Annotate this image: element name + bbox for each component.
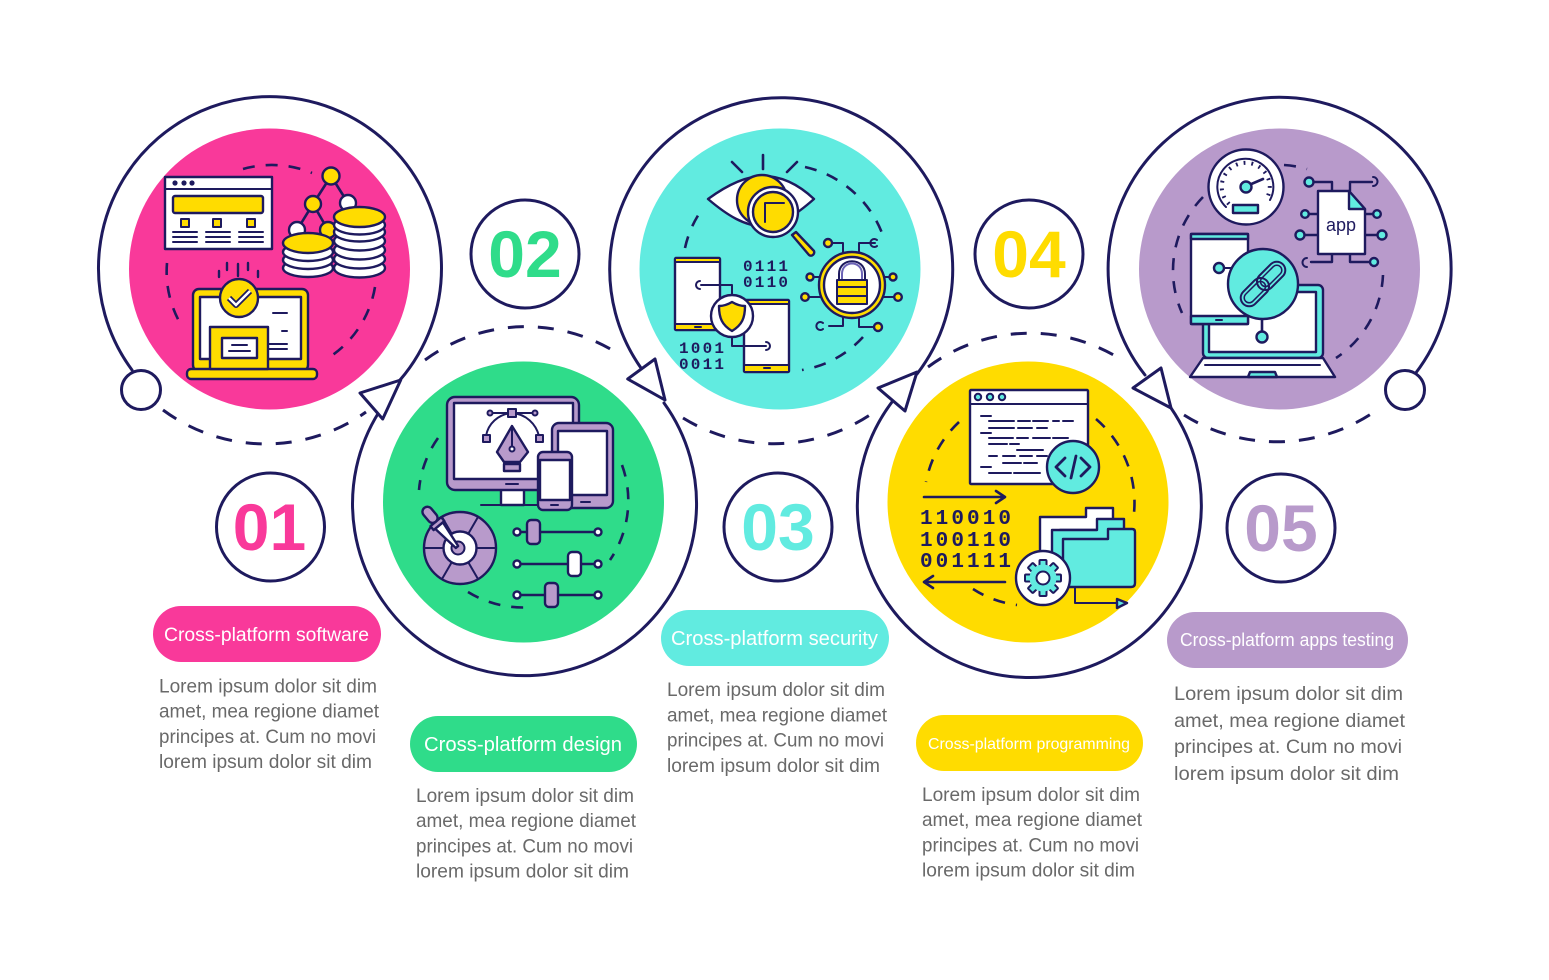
arrow: step 2 to step 3 xyxy=(628,359,665,400)
label: Cross-platform programming xyxy=(916,715,1143,771)
icon: tree and coin stacks xyxy=(283,168,385,278)
text: binary digits: 1001 xyxy=(679,340,724,358)
text block: step 3 description xyxy=(667,679,888,777)
panel: step 5 testing icon xyxy=(1139,128,1420,410)
text: binary code: 100110 xyxy=(920,530,1011,553)
text block: step 1 description xyxy=(159,676,380,773)
icon: lock with circuits xyxy=(801,239,902,331)
badge: number 03: 03 xyxy=(741,490,815,564)
arrow: step 4 to step 5 xyxy=(1133,368,1171,408)
label: Cross-platform design: Cross-platform design xyxy=(424,734,622,756)
text block: step 5 description: Lorem ipsum dolor sit dim xyxy=(1174,683,1403,705)
text block: step 5 description: principes at. Cum no movi xyxy=(1174,736,1402,758)
badge: number 04 xyxy=(975,200,1083,308)
text: binary digits xyxy=(679,258,788,374)
text block: step 1 description: lorem ipsum dolor sit dim xyxy=(159,751,372,773)
connector: outer rings and dashed paths xyxy=(98,97,1451,678)
text block: step 2 description: Lorem ipsum dolor sit dim xyxy=(416,785,634,807)
badge: number 05 xyxy=(1227,474,1335,582)
icon: color wheel with dropper xyxy=(419,503,496,584)
icon: sliders xyxy=(514,520,602,607)
text block: step 1 description: principes at. Cum no movi xyxy=(159,726,376,748)
icon: eye and magnifier xyxy=(708,155,814,256)
text block: step 4 description: principes at. Cum no movi xyxy=(922,834,1139,856)
text: binary code: 001111 xyxy=(920,551,1011,574)
label: Cross-platform apps testing: Cross-platform apps testing xyxy=(1180,630,1394,650)
badge: number 02 xyxy=(471,200,579,308)
text block: step 1 description: Lorem ipsum dolor sit dim xyxy=(159,676,377,698)
icon: app file with circuits xyxy=(1296,177,1386,267)
text: binary digits: 0110 xyxy=(743,274,788,292)
text: app label: app xyxy=(1326,215,1356,235)
badge: number 04: 04 xyxy=(992,217,1066,291)
icon: code window xyxy=(970,390,1099,493)
text block: step 4 description: amet, mea regione diamet xyxy=(922,809,1143,831)
label: Cross-platform security: Cross-platform security xyxy=(671,628,878,650)
text block: step 1 description: amet, mea regione diamet xyxy=(159,700,380,722)
text block: step 2 description: lorem ipsum dolor sit dim xyxy=(416,860,629,882)
icon: chain link badge xyxy=(1228,249,1298,342)
text block: step 4 description xyxy=(922,784,1143,882)
arrow: step 1 to step 2 xyxy=(360,380,401,419)
panel: step 3 security icon xyxy=(640,128,920,410)
arrow: step 3 to step 4 xyxy=(878,372,917,411)
icon: data arrows xyxy=(924,491,1005,588)
text block: step 2 description: amet, mea regione diamet xyxy=(416,810,637,832)
text block: step 5 description xyxy=(1174,683,1406,785)
text block: step 3 description: Lorem ipsum dolor sit dim xyxy=(667,679,885,701)
badge: number 05: 05 xyxy=(1244,491,1318,565)
text block: step 5 description: lorem ipsum dolor sit dim xyxy=(1174,763,1399,785)
label: Cross-platform software: Cross-platform software xyxy=(164,625,369,646)
text block: step 4 description: lorem ipsum dolor sit dim xyxy=(922,860,1135,882)
text block: step 2 description: principes at. Cum no movi xyxy=(416,836,633,858)
icon: monitor with pen tool xyxy=(447,397,579,505)
panel: step 2 design icon xyxy=(383,362,664,642)
text: binary digits: 0111 xyxy=(743,258,788,276)
text block: step 3 description: principes at. Cum no movi xyxy=(667,730,884,752)
badge: number 01 xyxy=(216,473,324,581)
icon: laptop xyxy=(1190,285,1335,377)
label: Cross-platform apps testing xyxy=(1167,612,1408,668)
text block: step 3 description: lorem ipsum dolor sit dim xyxy=(667,755,880,777)
badge: number 03 xyxy=(724,473,832,581)
text block: step 4 description: Lorem ipsum dolor sit dim xyxy=(922,784,1140,806)
text block: step 2 description xyxy=(416,785,637,882)
icon: folders with gear xyxy=(1016,508,1135,608)
label: Cross-platform programming: Cross-platform programming xyxy=(928,736,1130,753)
text block: step 3 description: amet, mea regione diamet xyxy=(667,704,888,726)
text: binary code: 110010 xyxy=(920,508,1011,531)
badge: number 01: 01 xyxy=(233,490,306,564)
icon: speed gauge xyxy=(1208,150,1284,224)
panel: step 1 software icon xyxy=(129,128,410,410)
icon: devices with shield xyxy=(675,258,789,372)
label: Cross-platform software xyxy=(153,606,381,662)
icon: tablet and phone xyxy=(538,423,613,510)
badge: number 02: 02 xyxy=(488,217,562,291)
label: Cross-platform security xyxy=(661,610,889,666)
icon: browser window xyxy=(165,177,272,249)
icon: tablet xyxy=(1191,234,1248,324)
text: binary digits: 0011 xyxy=(679,356,724,374)
text block: step 5 description: amet, mea regione diamet xyxy=(1174,710,1406,732)
text: binary code xyxy=(920,508,1011,574)
icon: laptop with check xyxy=(187,263,317,379)
label: Cross-platform design xyxy=(410,716,637,772)
panel: step 4 programming icon xyxy=(888,362,1168,642)
